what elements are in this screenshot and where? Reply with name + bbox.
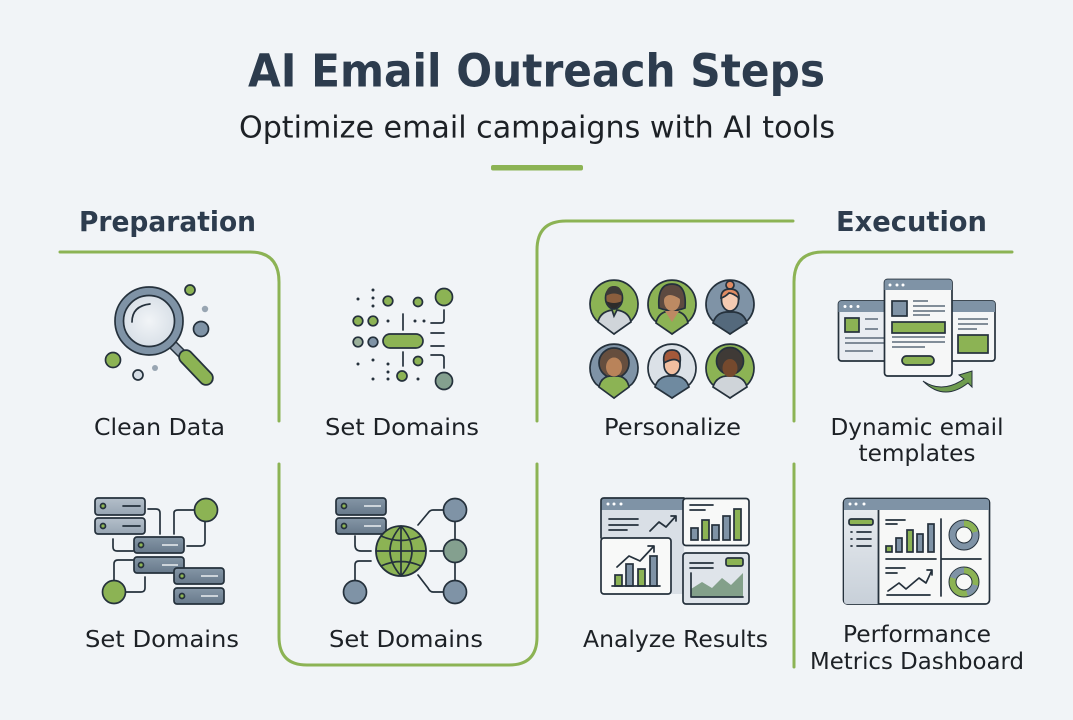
avatar 5 bbox=[648, 344, 696, 398]
avatar 3 bbox=[706, 280, 754, 334]
browser window backdrop bbox=[601, 498, 684, 594]
title accent bar bbox=[491, 165, 583, 170]
avatar 6 bbox=[706, 344, 754, 398]
title: AI Email Outreach Steps bbox=[248, 44, 825, 98]
label: Clean Data: Clean Data bbox=[94, 413, 225, 441]
label: Set Domains (top): Set Domains bbox=[325, 413, 479, 441]
icon: analytics windows bbox=[601, 498, 749, 604]
icon: magnifying glass with data dots bbox=[106, 285, 208, 380]
icon: personalized avatars bbox=[590, 280, 754, 398]
curved arrow bbox=[923, 371, 972, 392]
left template window bbox=[838, 301, 888, 361]
label: Set Domains (bottom left): Set Domains bbox=[85, 625, 239, 653]
label: Personalize: Personalize bbox=[604, 413, 741, 441]
avatar 2 bbox=[648, 280, 696, 334]
icon: dotted data flow bbox=[353, 288, 452, 390]
right template window bbox=[945, 301, 995, 361]
donut bottom bbox=[952, 570, 976, 594]
label: Analyze Results: Analyze Results bbox=[583, 625, 768, 653]
icon: linked servers bbox=[95, 498, 224, 604]
heading: Preparation: Preparation bbox=[79, 205, 256, 238]
label: Metrics Dashboard: Metrics Dashboard bbox=[810, 647, 1024, 675]
avatar 4 bbox=[590, 344, 638, 398]
centre template window bbox=[884, 280, 952, 376]
avatar 1 bbox=[590, 280, 638, 334]
label: Set Domains (bottom middle): Set Domains bbox=[329, 625, 483, 653]
label: Dynamic email templates: Dynamic email bbox=[830, 413, 1004, 441]
lower right area chart card bbox=[683, 553, 749, 604]
icon: performance dashboard bbox=[844, 498, 990, 604]
icon: dynamic email templates bbox=[838, 280, 995, 392]
label: Performance: Performance bbox=[843, 620, 991, 648]
donut top bbox=[952, 524, 976, 546]
label: templates second line: templates bbox=[858, 439, 976, 467]
icon: server and globe network bbox=[336, 498, 466, 604]
top right bar card bbox=[683, 498, 749, 546]
lower left chart card bbox=[601, 538, 671, 594]
subtitle: Optimize email campaigns with AI tools bbox=[239, 110, 835, 146]
heading: Execution: Execution bbox=[836, 205, 987, 238]
section frame lines bbox=[60, 221, 1012, 667]
